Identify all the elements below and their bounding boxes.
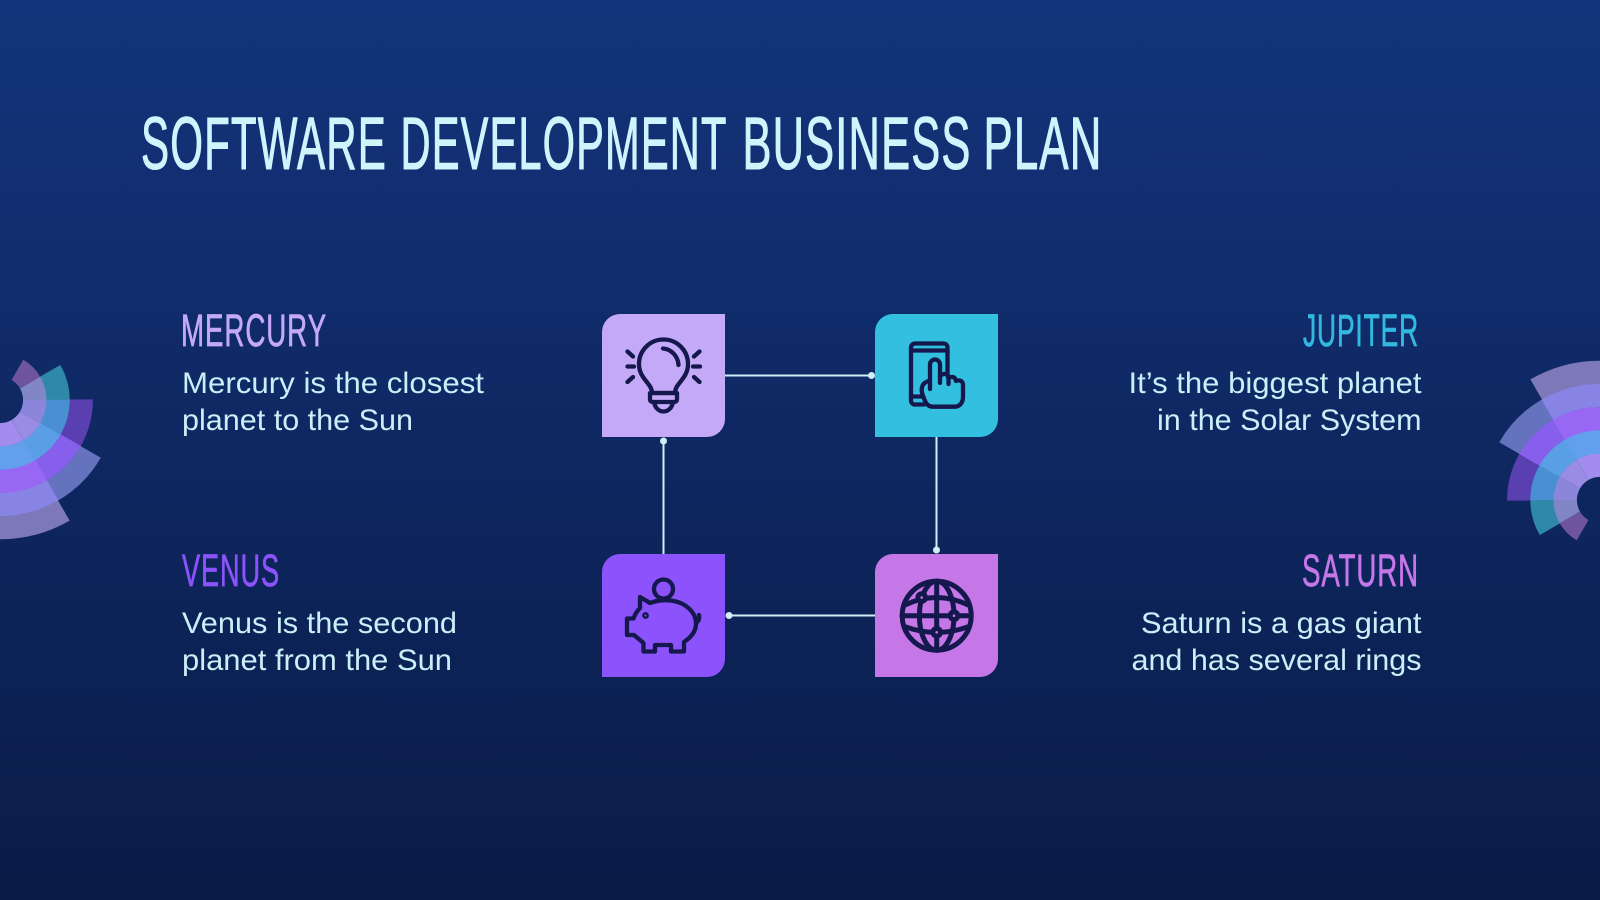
text block: Saturn <box>1132 545 1422 677</box>
description: Mercury: Mercury is the closest <box>182 367 485 400</box>
heading: Venus: VENUS <box>182 545 280 596</box>
icon: globe <box>902 581 971 650</box>
connector: bulb to piggy <box>660 438 667 554</box>
decorative fan: left <box>0 226 174 574</box>
tile: piggy bank <box>602 554 725 677</box>
icon: phone with hand <box>911 344 963 407</box>
connector: phone to globe <box>933 437 940 554</box>
description: Saturn: Saturn is a gas giant <box>1141 607 1422 640</box>
decorative fan: right <box>1426 326 1600 674</box>
heading: Jupiter: JUPITER <box>1303 305 1419 356</box>
description: Jupiter: in the Solar System <box>1157 404 1422 437</box>
heading: Mercury: MERCURY <box>181 305 327 356</box>
connector: bulb to phone <box>725 372 875 379</box>
description: Venus: planet from the Sun <box>182 644 452 677</box>
tile: globe <box>875 554 998 677</box>
title: DEVELOPMENT <box>400 102 728 185</box>
heading: Saturn: SATURN <box>1302 545 1419 596</box>
description: Mercury <box>182 367 485 437</box>
text block: Jupiter <box>1128 305 1422 437</box>
description: Venus: Venus is the second <box>182 607 457 640</box>
connector: piggy to globe <box>726 612 875 619</box>
title: BUSINESS <box>742 102 972 185</box>
text block: Venus <box>182 545 457 677</box>
tile: phone <box>875 314 998 437</box>
description: Mercury: planet to the Sun <box>182 404 413 437</box>
tile: light bulb <box>602 314 725 437</box>
title <box>141 102 1102 185</box>
description: Venus <box>182 607 457 677</box>
description: Jupiter <box>1128 367 1422 437</box>
text block: Mercury <box>181 305 485 437</box>
icon: piggy bank <box>627 580 699 652</box>
title: PLAN <box>984 102 1102 185</box>
title: SOFTWARE <box>141 102 387 185</box>
icon: light bulb <box>628 340 700 412</box>
description: Jupiter: It’s the biggest planet <box>1128 367 1422 400</box>
description: Saturn: and has several rings <box>1132 644 1422 677</box>
description: Saturn <box>1132 607 1422 677</box>
